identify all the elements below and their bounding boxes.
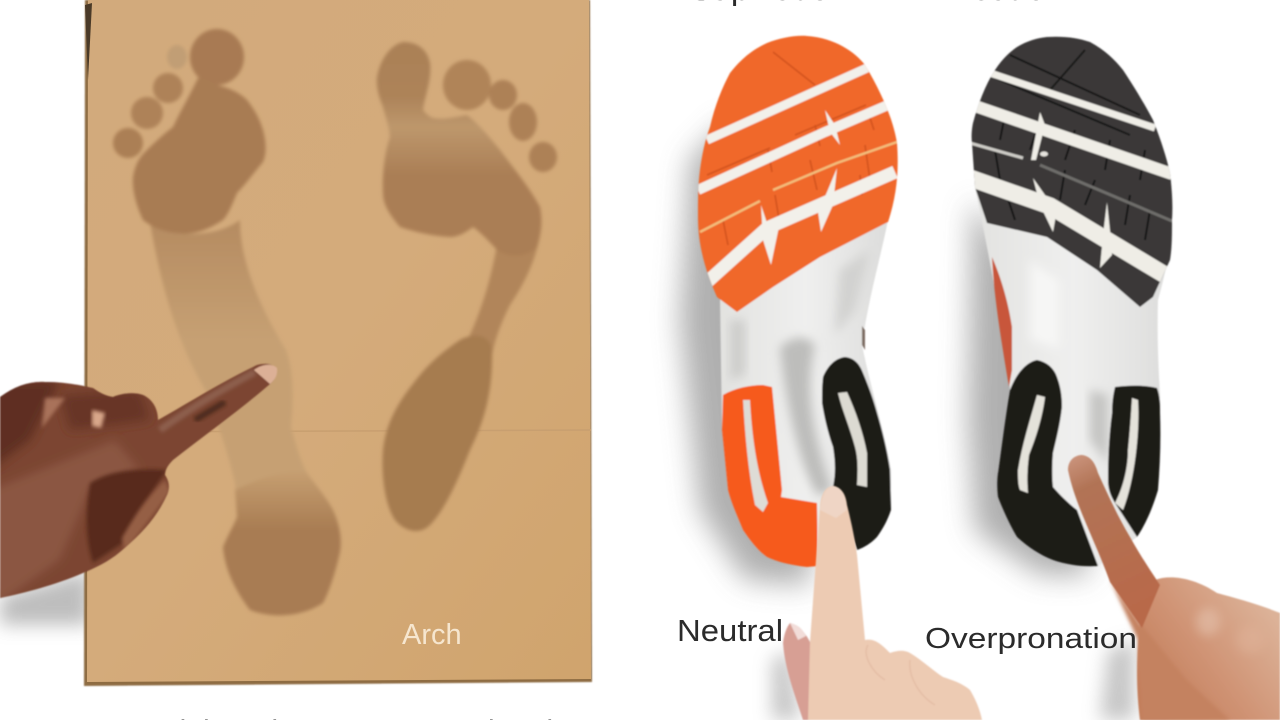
midsole shading [780, 338, 832, 495]
black heel pad left [997, 360, 1098, 566]
orange heel pad [722, 385, 818, 567]
orange outsole tread [690, 30, 905, 320]
label: Neutral under left shoe: Neutral [677, 613, 783, 648]
label: Overpronation: Overpronation [925, 623, 1137, 655]
footprint: right normal arch foot [377, 42, 557, 531]
shadow: dark hand on white [0, 570, 90, 625]
icon: tan hand pointing at right shoe [1068, 455, 1280, 720]
icon: light hand pointing at left shoe [783, 486, 982, 720]
midsole shading [1090, 390, 1108, 463]
black heel pad [822, 357, 891, 550]
icon: dark hand pointing at arch [0, 364, 277, 610]
orange peek under midsole [992, 257, 1012, 387]
footprint: left high arch foot [113, 29, 341, 615]
shoe: right black sole [960, 30, 1180, 566]
shoe: left orange sole [690, 30, 905, 567]
black heel pad right [1108, 386, 1160, 537]
shadow: pointing hands [772, 640, 1135, 720]
shadow: shoes [680, 120, 1090, 585]
black outsole tread [970, 36, 1174, 308]
label: Arch: Arch [402, 619, 462, 651]
panel: cardboard sheet [84, 0, 592, 686]
